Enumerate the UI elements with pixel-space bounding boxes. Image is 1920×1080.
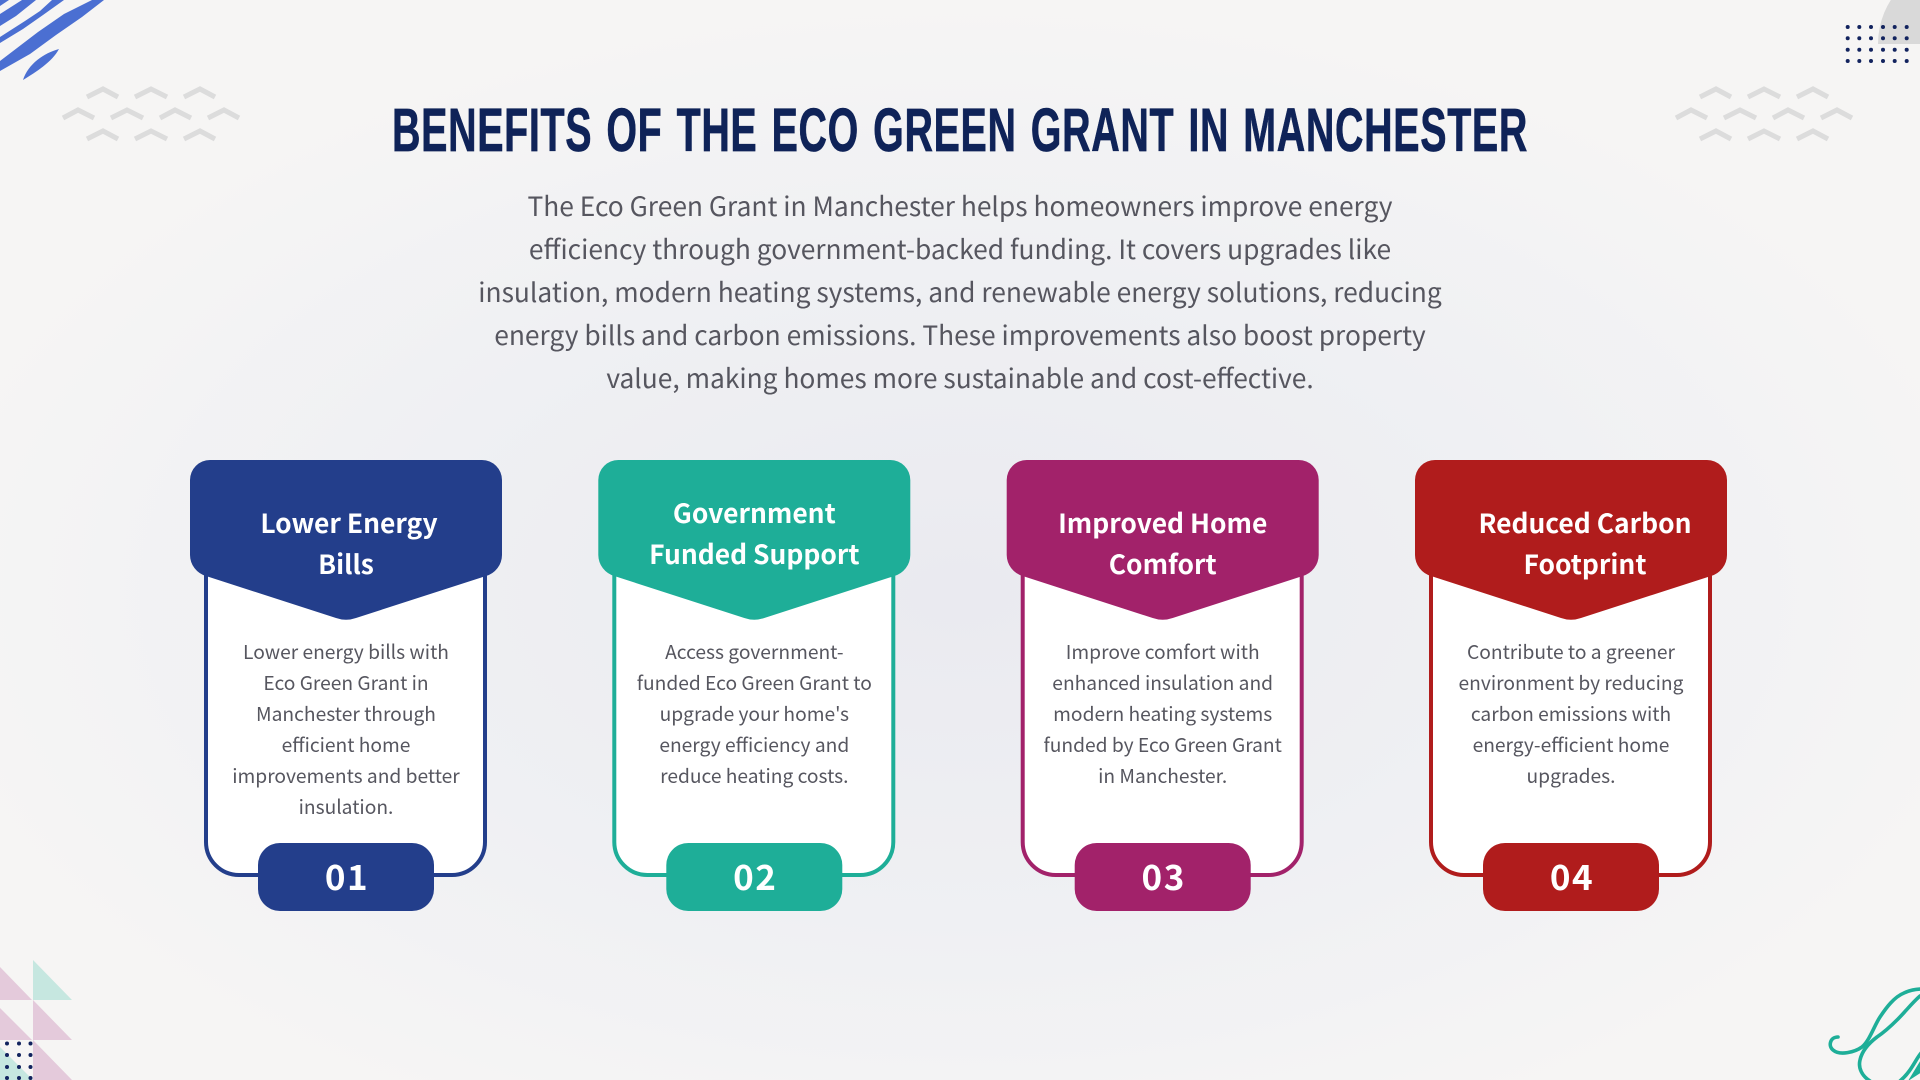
card 2 heading: Government xyxy=(673,492,836,531)
card 2 header xyxy=(598,460,910,620)
card 3 description: enhanced insulation and xyxy=(1052,668,1273,696)
card 3 body outline xyxy=(1023,560,1302,875)
card 2 body outline xyxy=(614,560,893,875)
card 1 description: Eco Green Grant in xyxy=(263,668,429,696)
card 1 description xyxy=(232,637,460,820)
card 3 description xyxy=(1044,637,1282,789)
card 3 heading: Comfort xyxy=(1109,543,1217,582)
decoration: grey circle and dot grid top right xyxy=(1846,0,1920,63)
card 4 description: environment by reducing xyxy=(1459,668,1684,696)
card 3 description: Improve comfort with xyxy=(1066,637,1260,665)
card 1 heading: Lower Energy xyxy=(260,502,438,541)
card 2: government funded support xyxy=(598,460,910,911)
card 1 description: improvements and better xyxy=(232,761,460,789)
card 1: lower energy bills xyxy=(190,460,502,911)
intro paragraph: efficiency through government-backed funding. It covers upgrades like xyxy=(529,228,1391,267)
card 1 header xyxy=(190,460,502,620)
card 2 description: upgrade your home's xyxy=(660,699,849,727)
card 1 description: Manchester through xyxy=(256,699,436,727)
card 3 number badge xyxy=(1075,843,1251,911)
card 4 heading xyxy=(1478,502,1692,582)
card 3: improved home comfort xyxy=(1007,460,1319,911)
decoration: triangles and dots bottom left xyxy=(0,960,72,1080)
card 3 header xyxy=(1007,460,1319,620)
card 4 description xyxy=(1459,637,1684,789)
intro paragraph: value, making homes more sustainable and cost-effective. xyxy=(606,357,1314,396)
card 2 description: funded Eco Green Grant to xyxy=(637,668,872,696)
card 4 description: carbon emissions with xyxy=(1471,699,1671,727)
card 1 description: efficient home xyxy=(282,730,410,758)
card 4 number: 04 xyxy=(1550,850,1594,901)
intro paragraph: The Eco Green Grant in Manchester helps homeowners improve energy xyxy=(528,185,1393,224)
decoration: chevron pattern right xyxy=(1676,89,1852,139)
card 1 heading xyxy=(260,502,438,582)
card 1 description: insulation. xyxy=(299,792,393,820)
card 3 heading xyxy=(1058,502,1267,582)
card 4 heading: Footprint xyxy=(1524,543,1646,582)
card 2 description: reduce heating costs. xyxy=(660,761,848,789)
card 4 description: upgrades. xyxy=(1527,761,1615,789)
decoration: chevron pattern left xyxy=(63,89,239,139)
card 3 description: modern heating systems xyxy=(1053,699,1272,727)
card 4 body outline xyxy=(1431,560,1710,875)
decoration: blue brush strokes top left xyxy=(0,0,104,80)
decoration: teal script flourish bottom right xyxy=(1830,989,1920,1080)
card 2 heading: Funded Support xyxy=(649,533,859,572)
card 4 header xyxy=(1415,460,1727,620)
card 1 number: 01 xyxy=(325,850,369,901)
card 2 description: Access government- xyxy=(665,637,844,665)
card 2 number badge xyxy=(666,843,842,911)
intro paragraph xyxy=(478,185,1442,396)
card 1 heading: Bills xyxy=(318,543,374,582)
card 2 number: 02 xyxy=(733,850,777,901)
card 2 heading xyxy=(649,492,859,572)
intro paragraph: energy bills and carbon emissions. These improvements also boost property xyxy=(494,314,1426,353)
card 1 description: Lower energy bills with xyxy=(243,637,449,665)
card 1 body outline xyxy=(206,560,485,875)
card 4 description: energy-efficient home xyxy=(1473,730,1669,758)
intro paragraph: insulation, modern heating systems, and renewable energy solutions, reducing xyxy=(478,271,1442,310)
card 3 description: funded by Eco Green Grant xyxy=(1044,730,1282,758)
card 3 description: in Manchester. xyxy=(1098,761,1227,789)
card 1 number badge xyxy=(258,843,434,911)
card 2 description: energy efficiency and xyxy=(659,730,849,758)
card 4: reduced carbon footprint xyxy=(1415,460,1727,911)
card 4 description: Contribute to a greener xyxy=(1467,637,1676,665)
card 2 description xyxy=(637,637,872,789)
card 3 heading: Improved Home xyxy=(1058,502,1267,541)
card 4 heading: Reduced Carbon xyxy=(1478,502,1692,541)
card 3 number: 03 xyxy=(1142,850,1186,901)
card 4 number badge xyxy=(1483,843,1659,911)
